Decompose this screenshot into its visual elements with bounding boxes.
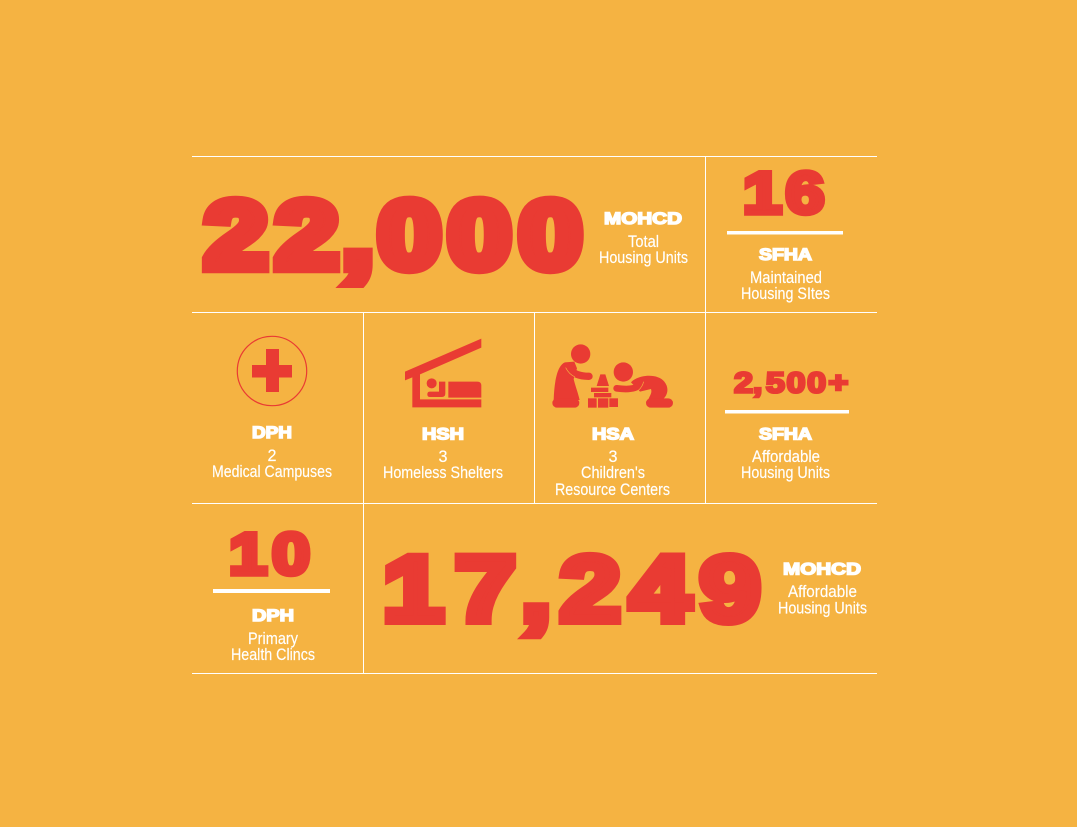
number: 16: 16 [743, 160, 824, 226]
panel: 17,249 MOHCD affordable housing units [383, 538, 867, 641]
text: Housing Units: Housing Units [599, 249, 688, 267]
panel: 22,000 MOHCD total housing units [205, 182, 688, 289]
text: 3: 3 [438, 448, 448, 466]
rule [725, 410, 849, 414]
panel: 10 DPH primary health clinics [213, 523, 330, 664]
icon: medical cross in circle [237, 336, 307, 406]
icon: person in bed under shelter [405, 339, 481, 407]
big number: 22,000: 22,000 [205, 182, 582, 289]
number: 2,500+: 2,500+ [734, 366, 848, 399]
label: MOHCD: MOHCD [604, 209, 682, 228]
text: Resource Centers: Resource Centers [555, 481, 670, 499]
rule [727, 231, 843, 234]
text: Primary: Primary [248, 630, 299, 648]
text: 3: 3 [608, 448, 618, 466]
rule [213, 589, 330, 593]
panel: 2,500+ SFHA affordable housing units [725, 366, 849, 482]
text: 2: 2 [268, 447, 276, 465]
text: Medical Campuses: Medical Campuses [212, 463, 332, 481]
label: DPH: DPH [252, 606, 294, 625]
text: Housing Units: Housing Units [741, 464, 830, 482]
panel: 16 SFHA maintained housing sites [727, 160, 843, 303]
icon: two children playing with blocks [552, 344, 673, 408]
label: HSH: HSH [422, 424, 464, 444]
text: Children's: Children's [581, 464, 645, 482]
text: Maintained: Maintained [750, 269, 822, 287]
panel: HSH homeless shelters [383, 339, 503, 482]
number: 10: 10 [229, 523, 310, 587]
text: Housing SItes: Housing SItes [741, 285, 830, 303]
panel: DPH medical campuses [212, 336, 332, 481]
text: Health Clincs: Health Clincs [231, 646, 315, 664]
label: HSA: HSA [592, 424, 634, 444]
label: SFHA: SFHA [759, 245, 812, 264]
text: Affordable: Affordable [788, 583, 857, 601]
text: Affordable: Affordable [752, 448, 820, 466]
big number: 17,249: 17,249 [383, 538, 760, 641]
label: DPH: DPH [252, 423, 292, 442]
panel: HSA children's resource centers [552, 344, 673, 499]
label: MOHCD: MOHCD [783, 560, 861, 578]
text: Housing Units: Housing Units [778, 600, 867, 618]
label: SFHA: SFHA [759, 424, 812, 444]
text: Homeless Shelters: Homeless Shelters [383, 464, 503, 482]
text: Total: Total [628, 233, 659, 251]
